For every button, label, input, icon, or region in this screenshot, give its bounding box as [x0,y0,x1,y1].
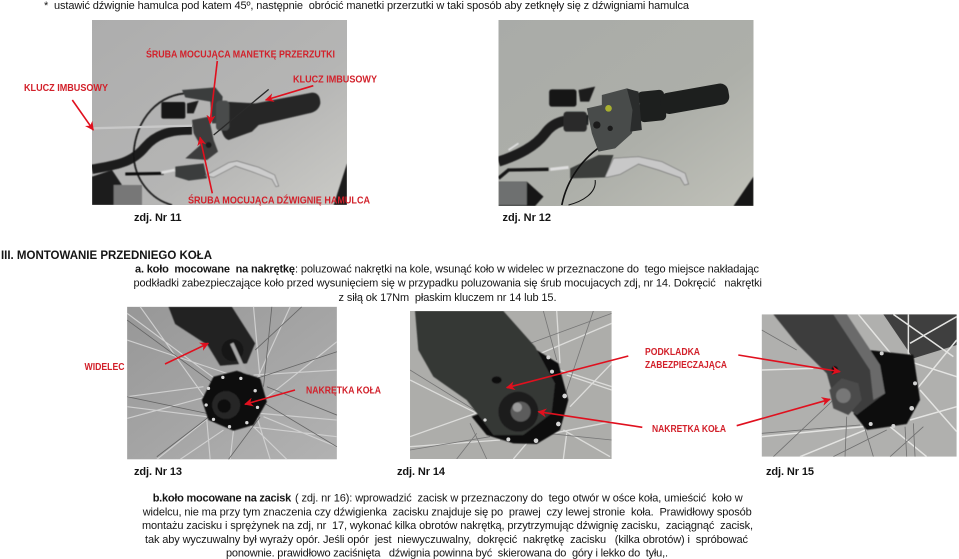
photo 11: brake lever with hex keys [92,20,347,205]
arrow: nut on photo 15 [737,399,830,426]
arrow: brake lever screw [200,137,212,193]
paragraph a: podkładki zabezpieczające koło przed wysunięciem się w przypadku poluzowania się śrub mocujacych zdj, nr 14. Dokręcić nakrętki [134,278,762,290]
paragraph b: widelcu, nie ma przy tym znaczenia czy dźwigienka zacisku znajduje się po prawej czy lewej stronie koła. Prawidłowy sposób [142,506,752,518]
label: right hex key: KLUCZ IMBUSOWY [293,74,377,86]
caption 13: zdj. Nr 13 [134,466,182,478]
spokes [410,311,612,459]
label: safety washer: PODKLADKA [645,347,700,358]
arrow: washer on photo 15 [738,355,840,372]
label: left hex key: KLUCZ IMBUSOWY [24,83,108,94]
arrow: left hex key [72,100,93,130]
label: safety washer second line: ZABEZPIECZAJĄCA [645,360,727,371]
spokes [762,314,957,457]
paragraph b: tak aby wyczuwalny był wyraży opór. Jeśli opór jest niewyczuwalny, dokręcić nakrętkę zacisku (kilka obrotów) i spróbować [145,534,748,546]
paragraph a: a. koło mocowane na nakrętkę [135,264,295,276]
arrow: wheel nut [245,390,295,404]
photo 13: fork and hub [127,306,337,460]
caption 15: zdj. Nr 15 [766,466,814,478]
photo 12: brake lever and shifter set [498,20,754,206]
arrow: right hex key [266,86,313,100]
label: wheel nut: NAKRĘTKA KOŁA [306,386,381,396]
label: fork: WIDELEC [84,362,124,373]
paragraph a: : poluzować nakrętki na kole, wsunąć koło w widelec w przeznaczone do tego miejsce nakładając [295,264,760,276]
caption 14: zdj. Nr 14 [397,466,446,478]
paragraph b [142,492,753,559]
paragraph a [134,264,762,304]
arrow: nut on photo 14 [538,412,642,427]
paragraph b: montażu zacisku i sprężynek na zdj, nr 17, wykonać kilka obrotów nakrętką, przytrzymując dźwignię zacisku, zaciągnąć zacisk, [142,520,753,532]
arrow: washer on photo 14 [507,356,628,388]
photo 14: fork end with washer and nut [410,311,612,459]
paragraph a: z siłą ok 17Nm płaskim kluczem nr 14 lub 15. [338,292,556,304]
section heading: III. MONTOWANIE PRZEDNIEGO KOŁA [1,250,212,262]
caption 12: zdj. Nr 12 [502,212,551,224]
label: wheel nut right: NAKRETKA KOŁA [652,424,726,435]
instruction line: * ustawić dźwignie hamulca pod katem 45º, następnie obrócić manetki przerzutki w taki sposób aby zetknęły się z dźwigniami hamulca [44,0,690,12]
spokes [127,307,337,459]
paragraph b: ( zdj. nr 16): wprowadzić zacisk w przeznaczony do tego otwór w ośce koła, umieścić koło w [295,492,743,504]
label: brake lever screw: ŚRUBA MOCUJĄCA DŹWIGNIĘ HAMULCA [188,194,370,206]
arrow: shifter screw [210,61,217,123]
photo 15: fork, washer and nut close-up [762,314,957,457]
label: shifter screw: ŚRUBA MOCUJĄCA MANETKĘ PRZERZUTKI [146,48,335,60]
caption 11: zdj. Nr 11 [134,212,182,224]
arrow: fork [165,343,208,364]
paragraph b: b.koło mocowane na zacisk [153,492,292,504]
